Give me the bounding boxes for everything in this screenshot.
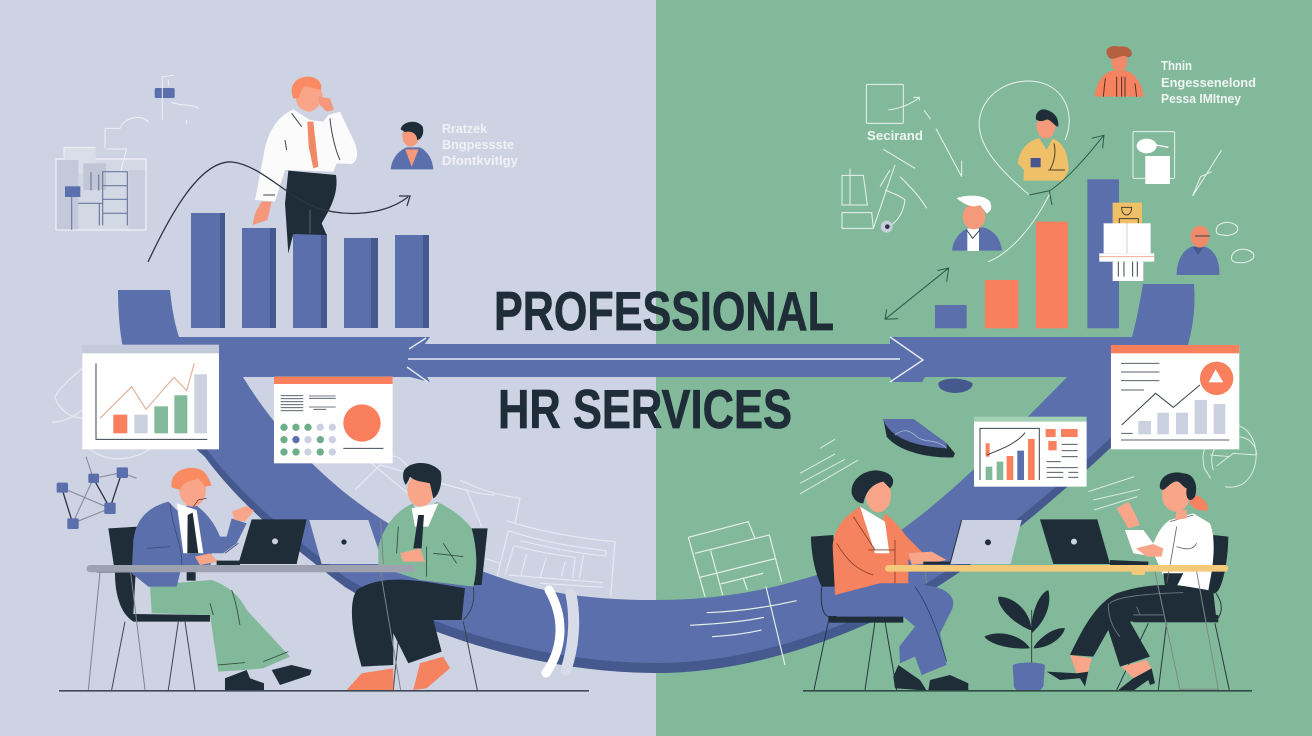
icon: light laptop	[309, 520, 405, 565]
person: man with glasses avatar	[1177, 226, 1219, 275]
icon: right meeting table	[885, 565, 1228, 689]
chart: right line board	[1111, 345, 1239, 449]
text block: left caption: Bngpessste	[442, 137, 514, 152]
text block: right small label: Secirand	[867, 128, 923, 143]
group: top right scene	[842, 46, 1254, 328]
group: bottom left scene	[57, 345, 488, 690]
icon: ground line left	[59, 690, 589, 692]
icon: light laptop right	[923, 520, 1022, 565]
text block: left caption: Rratzek	[442, 121, 488, 136]
icon: dark laptop right	[1040, 519, 1148, 565]
text block: right top caption	[1161, 58, 1256, 106]
chart: center dashboard board	[974, 417, 1087, 487]
arrow: curved growth line over man	[148, 162, 410, 262]
band: ribbon shadow edge	[196, 438, 1111, 673]
icon: ribbon line doodles right	[688, 522, 797, 665]
person: seated man in blue suit	[108, 468, 312, 690]
person: seated woman in white shirt	[1047, 472, 1229, 691]
icon: open book on stand	[1099, 203, 1154, 281]
chart: dot matrix board	[274, 377, 393, 463]
icon: left meeting table	[87, 520, 415, 690]
person: coral shirt avatar	[1094, 46, 1144, 97]
icon: left office blueprint doodle	[56, 75, 198, 230]
bar chart: rising bars	[935, 179, 1119, 328]
group: bottom right scene	[800, 345, 1257, 691]
bar chart: left five blue bars	[191, 213, 429, 328]
person: standing man in white shirt	[253, 77, 357, 253]
icon: motion line doodles	[800, 425, 1257, 510]
icon: white ribbon band wrap	[546, 590, 574, 673]
icon: white line doodles	[842, 81, 1254, 263]
icon: dark dot in gear	[885, 224, 890, 229]
text block: left caption: Dfontkvitlgy	[442, 153, 519, 168]
person: seated man in green jacket	[347, 463, 488, 690]
text block: left caption	[442, 121, 519, 168]
arrow: dark green rising arrows	[885, 135, 1104, 319]
panel: right green background	[656, 0, 1312, 736]
icon: dark laptop	[217, 519, 307, 565]
person: yellow shirt avatar	[1018, 109, 1069, 181]
icon: ground line right	[803, 690, 1252, 692]
icon: small gear	[881, 221, 893, 233]
text block: right top caption: Pessa IMItney	[1161, 91, 1242, 106]
arrow: central double-headed arrow	[407, 337, 923, 382]
title: HR Services: HR SERVICES	[498, 378, 792, 440]
person: seated man in coral jacket	[811, 470, 968, 691]
icon: left background line doodles	[52, 368, 615, 597]
icon: document with bubble	[1137, 139, 1170, 184]
chart: line and bar board	[82, 345, 219, 449]
band: blue curved U-shaped ribbon	[118, 284, 1195, 663]
title: Professional: PROFESSIONAL	[494, 280, 834, 342]
text block: right top caption: Thnin	[1161, 58, 1192, 73]
panel: left lavender background	[0, 0, 656, 736]
person: small avatar left	[391, 122, 433, 169]
text block: right top caption: Engessenelond	[1161, 75, 1256, 90]
icon: network nodes	[57, 457, 137, 529]
icon: blue blob by arrow	[938, 379, 973, 393]
icon: blue slate	[883, 419, 955, 457]
icon: plant	[984, 590, 1065, 691]
person: man with white cap	[952, 196, 1002, 251]
